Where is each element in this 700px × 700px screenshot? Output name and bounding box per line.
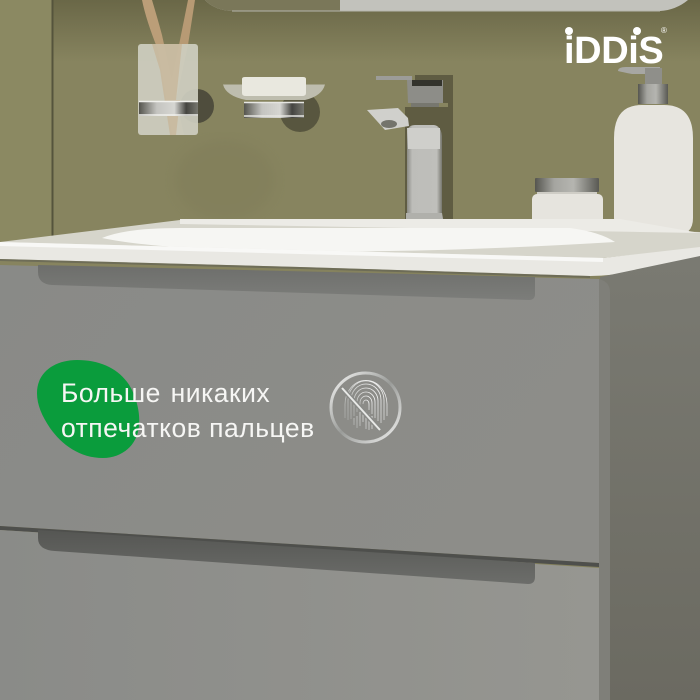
- faucet: [367, 75, 453, 230]
- logo: ®: [661, 26, 667, 35]
- lower drawer front: [0, 526, 599, 700]
- cabinet side: [599, 256, 700, 700]
- soap dispenser: [614, 67, 693, 235]
- green blob: [37, 360, 139, 458]
- caption text: [61, 378, 315, 443]
- wall: [0, 0, 700, 270]
- cream jar: [532, 178, 603, 234]
- sink countertop: [0, 219, 700, 278]
- upper drawer front: [0, 265, 599, 563]
- icon: crossed fingerprint: [331, 373, 400, 442]
- soap dish: [223, 77, 325, 132]
- caption text: отпечатков пальцев: [61, 413, 315, 443]
- logo: iDDiS: [564, 30, 663, 72]
- tumbler with toothbrushes: [138, 0, 214, 135]
- mirror: [205, 0, 688, 11]
- caption text: Больше никаких: [61, 378, 270, 408]
